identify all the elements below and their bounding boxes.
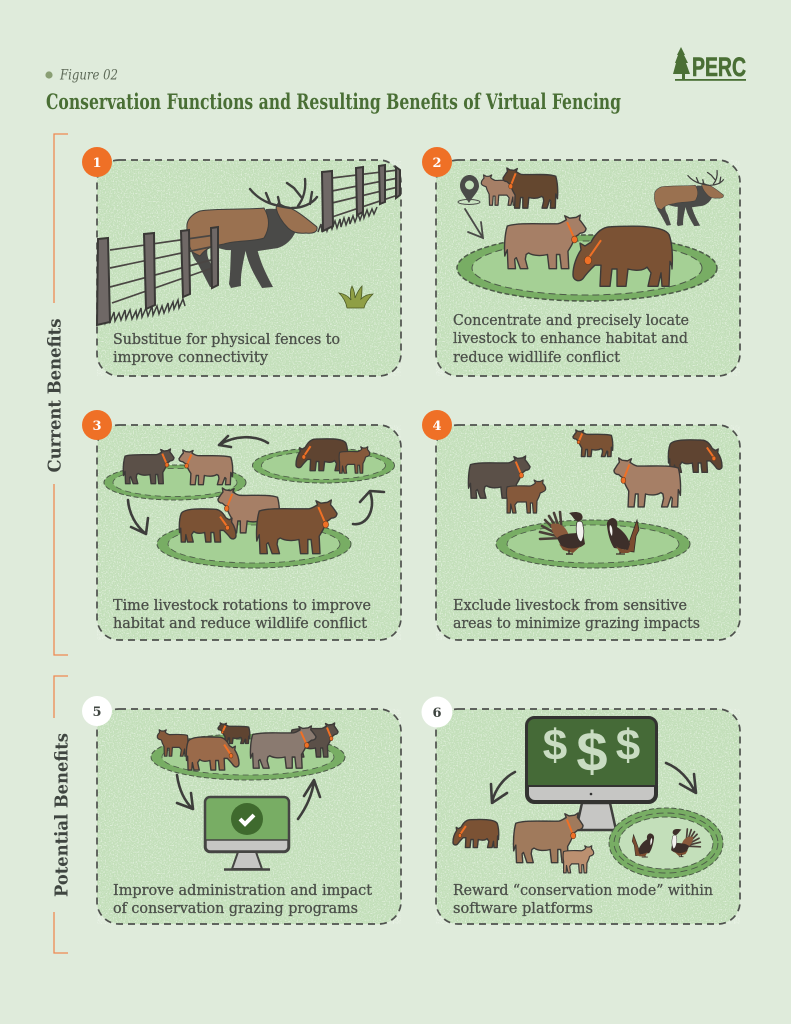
caption bbox=[113, 881, 372, 917]
caption: software platforms bbox=[453, 899, 593, 917]
left fence bbox=[97, 227, 218, 325]
caption bbox=[453, 596, 700, 632]
badge 1: 1 bbox=[92, 156, 102, 171]
icon: grass tuft bbox=[339, 286, 373, 308]
right fence bbox=[318, 165, 400, 232]
caption bbox=[453, 311, 689, 366]
section label: potential benefits bbox=[52, 676, 72, 953]
caption: improve connectivity bbox=[113, 348, 269, 366]
caption: Time livestock rotations to improve bbox=[113, 596, 371, 614]
section label: current benefits: Current Benefits bbox=[44, 318, 66, 472]
icon: grouse pair bbox=[632, 829, 700, 857]
badge 5: 5 bbox=[92, 705, 102, 720]
badge 1 bbox=[82, 147, 112, 177]
icon: monitor with dollars: $ bbox=[576, 720, 608, 783]
caption: Concentrate and precisely locate bbox=[453, 311, 689, 329]
badge 4: 4 bbox=[432, 419, 442, 434]
arrows bbox=[177, 775, 320, 819]
icon: monitor with dollars: $ bbox=[543, 721, 567, 770]
protected area bbox=[609, 808, 723, 878]
icon: monitor with dollars bbox=[526, 718, 656, 830]
section label: potential benefits: Potential Benefits bbox=[52, 733, 72, 897]
caption: habitat and reduce wildlife conflict bbox=[113, 614, 367, 632]
panel 1: substitute for fences bbox=[97, 160, 401, 376]
badge 3 bbox=[82, 410, 112, 440]
grazing areas bbox=[104, 448, 394, 568]
figure label: Figure 02 bbox=[59, 68, 118, 84]
cows bbox=[157, 723, 338, 770]
panel 2: concentrate and locate bbox=[436, 160, 740, 376]
caption: areas to minimize grazing impacts bbox=[453, 614, 700, 632]
caption: of conservation grazing programs bbox=[113, 899, 358, 917]
arrows bbox=[491, 763, 696, 803]
badge 6: 6 bbox=[432, 706, 442, 721]
badge 3: 3 bbox=[92, 419, 102, 434]
caption: Exclude livestock from sensitive bbox=[453, 596, 687, 614]
icon: monitor with check bbox=[205, 797, 289, 870]
caption: Substitue for physical fences to bbox=[113, 330, 340, 348]
caption: reduce widllife conflict bbox=[453, 348, 620, 366]
caption bbox=[113, 596, 371, 632]
cows bbox=[468, 430, 722, 513]
caption: Improve administration and impact bbox=[113, 881, 372, 899]
sensitive area bbox=[496, 520, 690, 568]
badge 2: 2 bbox=[432, 156, 442, 171]
panel 4: exclude livestock bbox=[436, 425, 740, 640]
caption bbox=[113, 330, 340, 366]
cows bbox=[123, 439, 370, 554]
cows on top bbox=[481, 168, 672, 286]
logo: PERC bbox=[673, 47, 746, 82]
panel 6: reward conservation mode bbox=[436, 709, 740, 924]
badge 4 bbox=[422, 410, 452, 440]
icon: elk bbox=[187, 179, 317, 288]
section label: current benefits bbox=[44, 134, 68, 655]
icon: location pin bbox=[458, 175, 480, 204]
arrows bbox=[128, 436, 384, 534]
logo: PERC: PERC bbox=[692, 52, 746, 82]
panel 5: administration bbox=[97, 709, 401, 924]
grazing area bbox=[457, 235, 717, 301]
grazing area bbox=[151, 734, 345, 780]
caption: Reward “conservation mode” within bbox=[453, 881, 713, 899]
panel 3: rotations bbox=[97, 425, 401, 640]
badge 2 bbox=[422, 147, 452, 177]
cows bbox=[453, 813, 594, 873]
badge 5 bbox=[82, 696, 112, 726]
figure label bbox=[45, 68, 118, 84]
icon: grouse pair bbox=[540, 512, 639, 554]
badge 6 bbox=[422, 696, 452, 728]
arrow bbox=[465, 209, 483, 238]
caption bbox=[453, 881, 713, 917]
icon: monitor with dollars: $ bbox=[616, 721, 640, 770]
icon: elk bbox=[654, 171, 723, 226]
caption: livestock to enhance habitat and bbox=[453, 329, 688, 347]
